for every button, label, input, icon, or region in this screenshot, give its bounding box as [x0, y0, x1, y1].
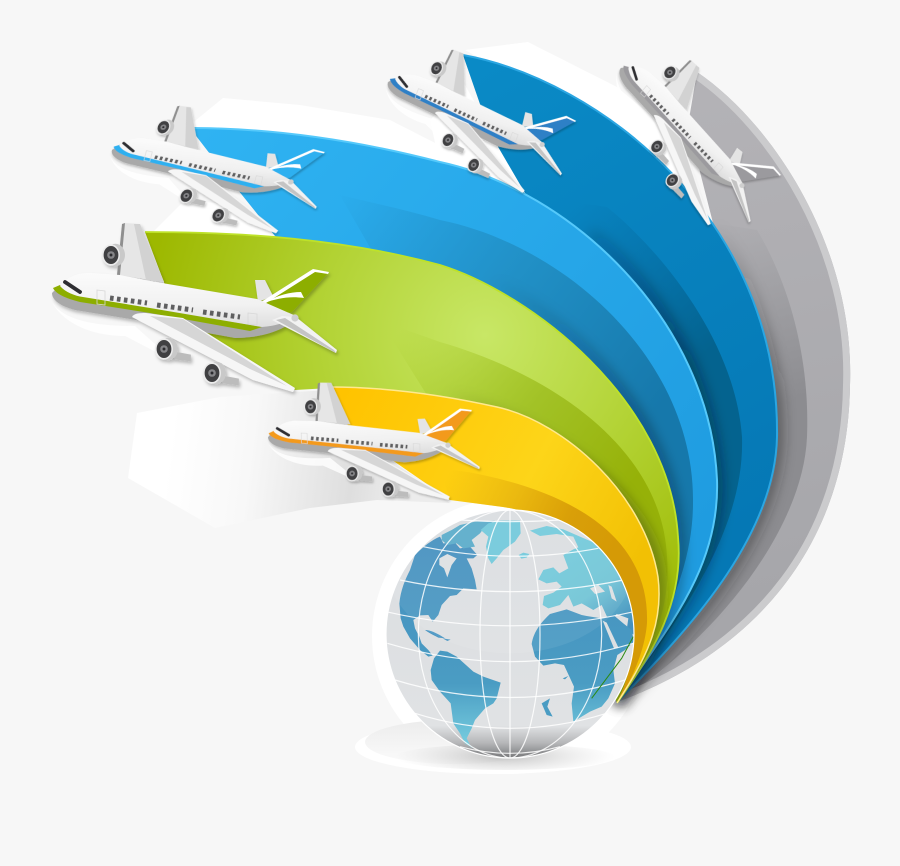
- continent: South America: [431, 651, 501, 748]
- band: green ribbon shadow: [380, 320, 668, 703]
- plane: gray: [576, 29, 807, 244]
- inland seas: [590, 585, 617, 602]
- green seam: [592, 637, 633, 698]
- white backdrop shapes: [128, 42, 700, 528]
- band: yellow ribbon shadow: [440, 470, 647, 703]
- ribbon: yellow: [330, 387, 659, 703]
- plane: orange: [265, 374, 481, 510]
- globe halo: [372, 498, 648, 774]
- continent: Africa: [532, 609, 634, 722]
- back-side landmass: [542, 676, 568, 717]
- continent: North America: [399, 537, 477, 657]
- plane: dark blue: [362, 36, 594, 201]
- ribbon: light blue: [190, 128, 717, 703]
- plane: light blue: [92, 101, 340, 236]
- Iceland: [519, 553, 529, 559]
- ribbon: green: [145, 232, 679, 703]
- Hudson Bay: [439, 554, 457, 577]
- ribbon: dark blue: [463, 55, 777, 703]
- ground shadow: [355, 720, 631, 774]
- band: light blue ribbon shadow: [340, 195, 693, 703]
- continent: Greenland: [481, 521, 521, 564]
- globe: [386, 510, 635, 759]
- band: gray ribbon shadow: [617, 223, 807, 702]
- plane: green: [50, 223, 337, 392]
- gloss: [400, 522, 626, 652]
- graticule: [386, 510, 634, 758]
- band: dark blue ribbon shadow: [560, 200, 742, 702]
- Red Sea: [603, 621, 618, 648]
- Caribbean: [425, 630, 451, 641]
- ribbon: gray: [617, 72, 850, 702]
- Arctic islands: [442, 521, 495, 548]
- continent: Eurasia: [530, 526, 637, 637]
